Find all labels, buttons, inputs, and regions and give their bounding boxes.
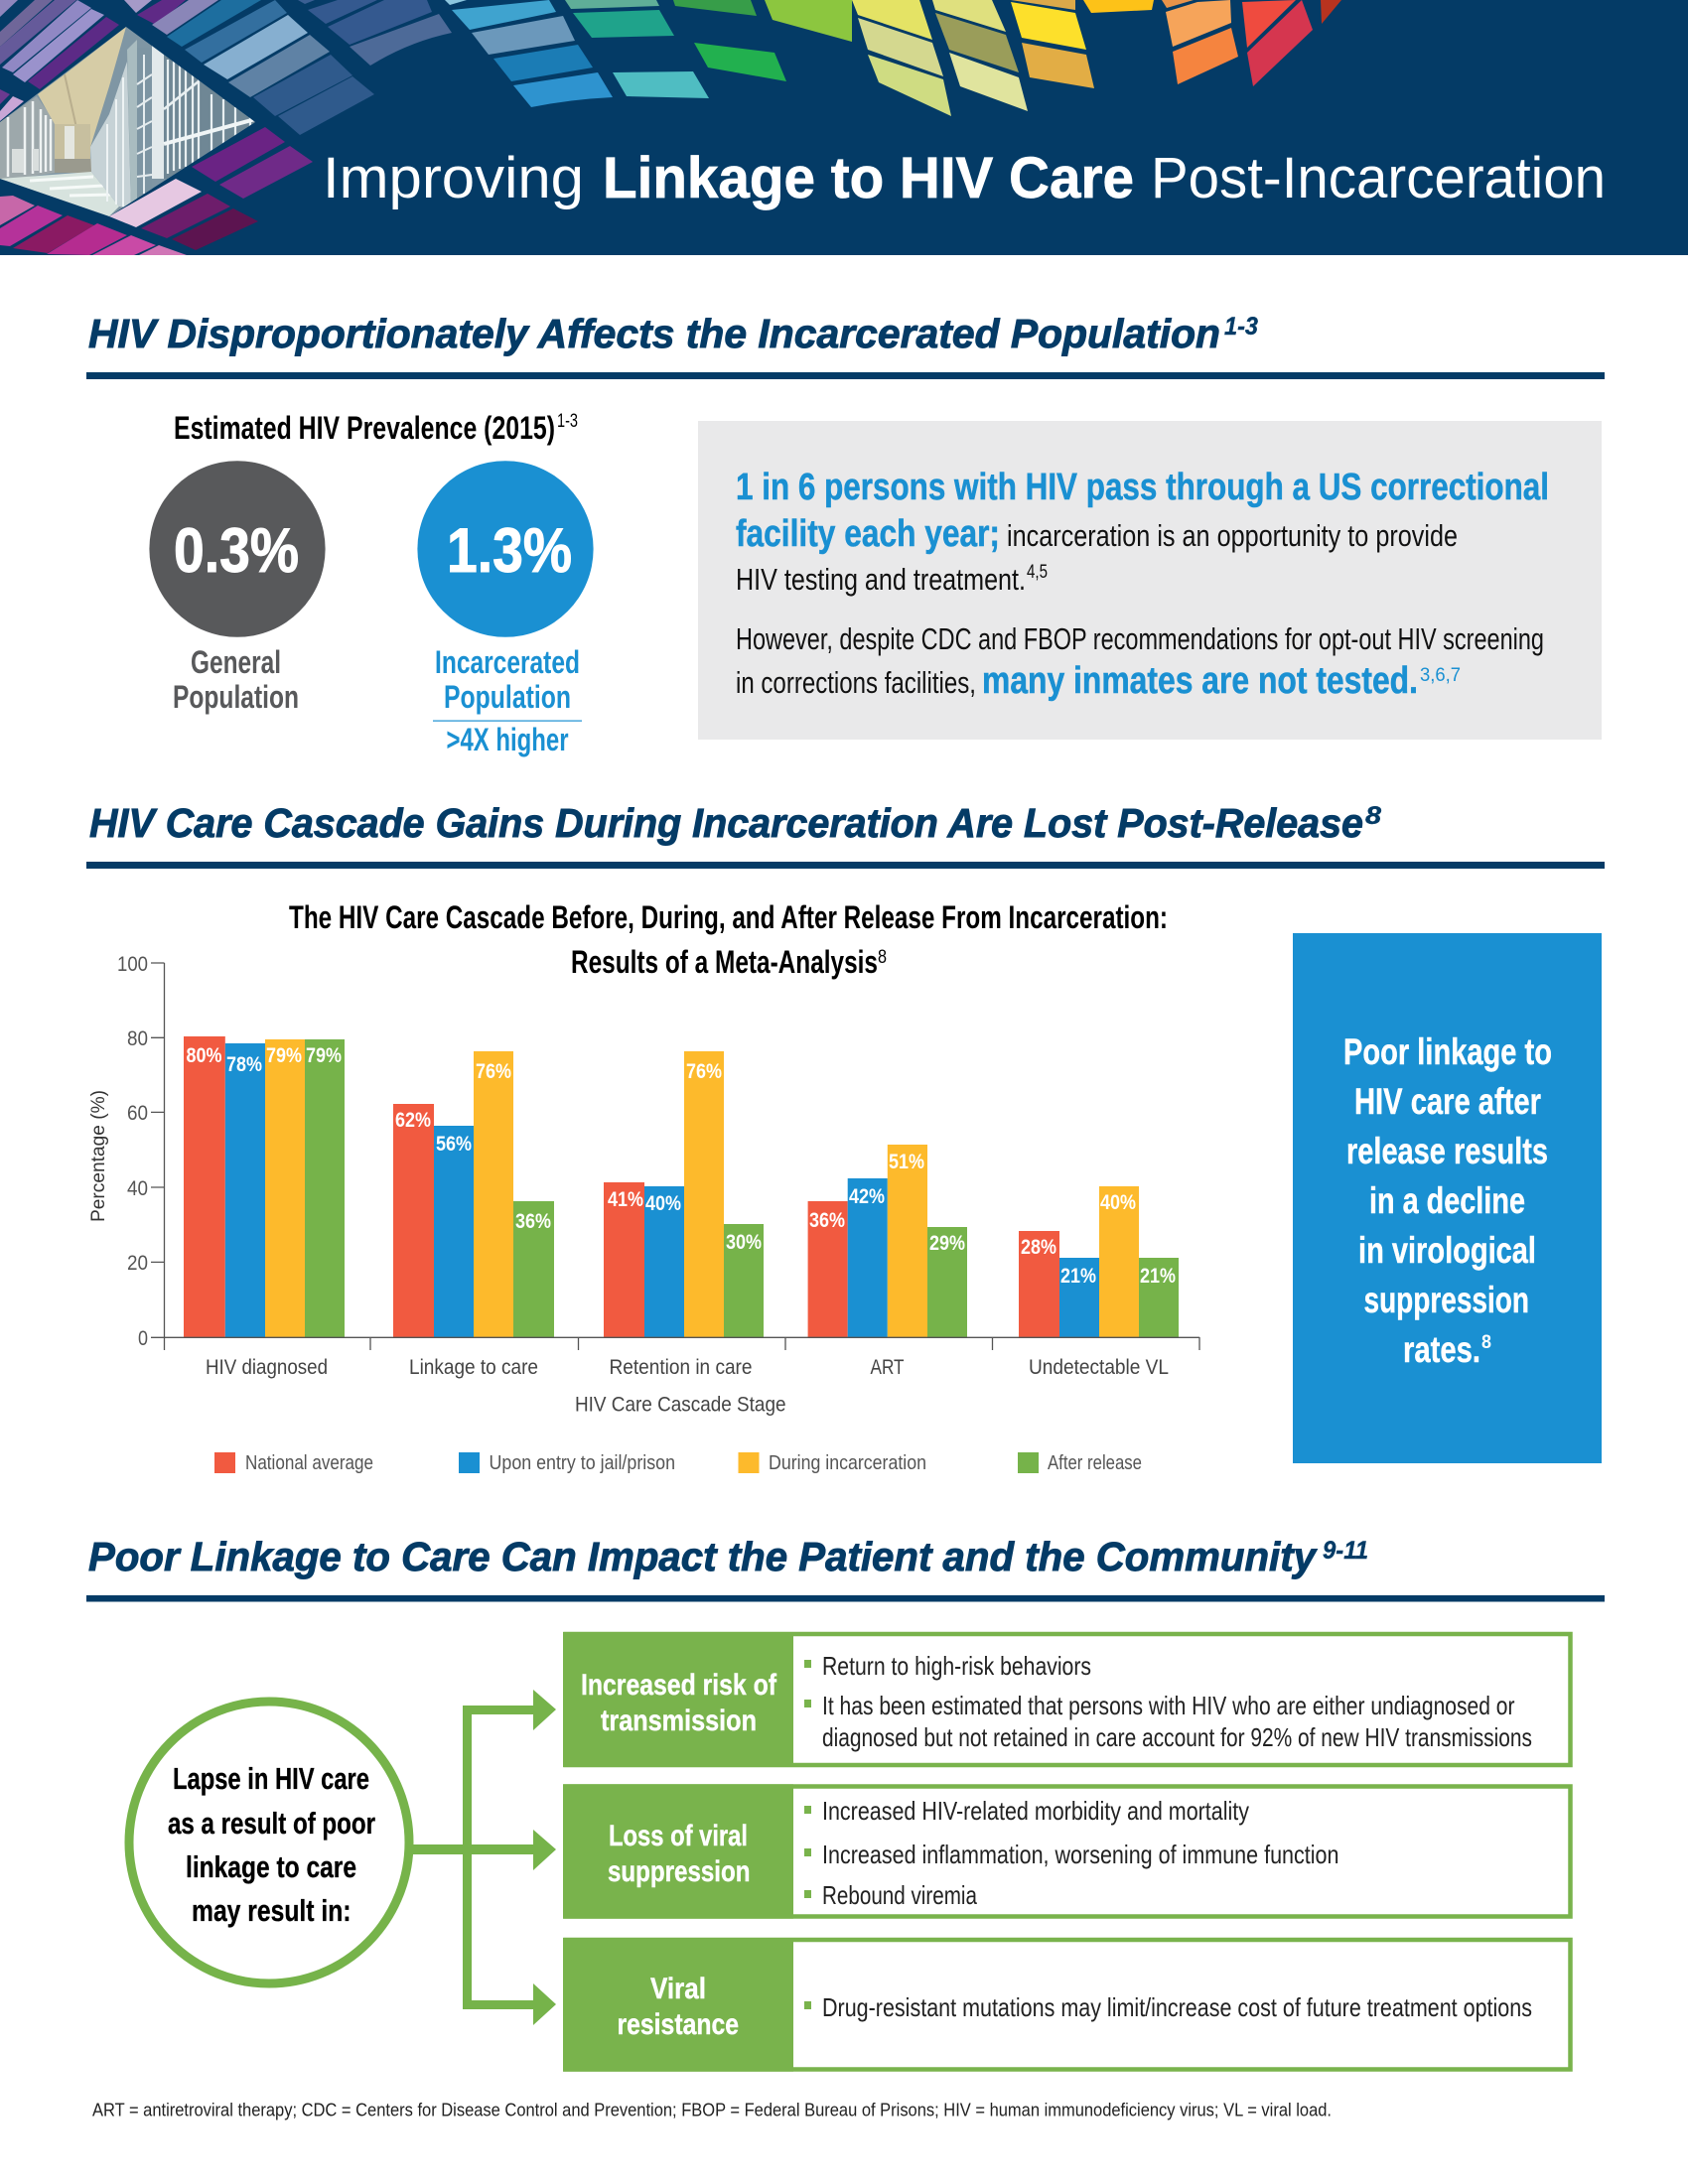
connector arrows [413, 1690, 556, 2025]
section heading: care cascade [86, 800, 1605, 869]
group: undetectable VL [1019, 1186, 1179, 1337]
y axis labels: Percentage (%) [88, 1090, 109, 1222]
group: retention in care: 40% [645, 1192, 681, 1215]
x axis labels [206, 1356, 1169, 1416]
circle: general population: 0.3% [174, 516, 299, 586]
section heading: HIV disproportionately affects: 1-3 [1224, 313, 1258, 341]
circle: incarcerated population: 1.3% [447, 516, 572, 586]
panel: HIV prevalence circles [149, 410, 594, 757]
panel: 1 in 6 callout: 3,6,7 [1420, 665, 1461, 686]
group: retention in care: 76% [686, 1060, 722, 1083]
group: undetectable VL: 21% [1140, 1265, 1176, 1288]
group: ART: 36% [809, 1209, 845, 1232]
section heading: HIV disproportionately affects [86, 311, 1605, 379]
legend: National average [245, 1452, 373, 1474]
group: linkage to care: 56% [436, 1133, 472, 1156]
section heading: HIV disproportionately affects: HIV Disproportionately Affects the Incarcerated Population [88, 311, 1220, 356]
purple and pink tiles bottom [0, 127, 313, 255]
section heading: care cascade: 8 [1365, 802, 1381, 830]
chart title: The HIV Care Cascade Before, During, and After Release From Incarceration: [289, 899, 1168, 935]
outcome: loss of viral suppression: Increased HIV-related morbidity and mortality [822, 1796, 1249, 1826]
title: Linkage to HIV Care [603, 146, 1134, 210]
panel: poor linkage callout: in virological [1358, 1230, 1536, 1271]
outcome: increased risk of transmission: diagnosed but not retained in care account for 92% of new HIV transmissions [822, 1722, 1532, 1752]
legend: During incarceration [769, 1452, 926, 1474]
group: HIV diagnosed: 79% [306, 1044, 342, 1067]
outcome: viral resistance: Viral [650, 1973, 706, 2005]
y axis labels [88, 953, 148, 1350]
group: linkage to care: 36% [515, 1210, 551, 1233]
outcome: loss of viral suppression: suppression [608, 1855, 751, 1888]
group: retention in care: 30% [726, 1231, 762, 1254]
panel: poor linkage callout: release results [1346, 1131, 1548, 1171]
group: HIV diagnosed: 79% [266, 1044, 302, 1067]
title: Improving [323, 146, 584, 210]
circle: incarcerated population: Incarcerated [435, 644, 580, 680]
prevalence heading: 1-3 [557, 411, 578, 432]
group: ART: 29% [929, 1232, 965, 1255]
axes [151, 963, 1199, 1350]
panel: poor linkage callout: rates. [1403, 1329, 1480, 1370]
left wall [0, 96, 57, 181]
outcome: viral resistance: Drug-resistant mutations may limit/increase cost of future treatment options [822, 1992, 1532, 2022]
outcome: increased risk of transmission: Return to high-risk behaviors [822, 1651, 1091, 1681]
y axis labels: 60 [127, 1102, 148, 1125]
group: undetectable VL: 21% [1060, 1265, 1096, 1288]
flow: lapse in care [129, 1690, 556, 2025]
blue tiles [124, 0, 709, 135]
y axis labels: 0 [138, 1327, 148, 1350]
panel: poor linkage callout: suppression [1364, 1280, 1529, 1320]
outcome: loss of viral suppression: Loss of viral [609, 1820, 748, 1852]
corridor photo [0, 20, 268, 218]
legend: Upon entry to jail/prison [489, 1452, 675, 1474]
title [328, 155, 1603, 210]
outcome: loss of viral suppression [563, 1784, 1571, 1919]
outcome: loss of viral suppression: Increased inflammation, worsening of immune function [822, 1840, 1338, 1869]
end wall [55, 124, 90, 159]
circle: general population [149, 461, 326, 715]
group: undetectable VL: 28% [1021, 1236, 1056, 1259]
circle: incarcerated population: >4X higher [447, 722, 568, 757]
header banner [0, 0, 1688, 255]
x axis labels: Linkage to care [409, 1356, 538, 1379]
legend [214, 1452, 1142, 1474]
outcome: increased risk of transmission [563, 1632, 1571, 1767]
group: undetectable VL: 40% [1100, 1191, 1136, 1214]
panel: 1 in 6 callout: HIV testing and treatment. [736, 562, 1026, 597]
panel: 1 in 6 callout: in corrections facilities, [736, 665, 976, 700]
footnote: ART = antiretroviral therapy; CDC = Centers for Disease Control and Prevention; FBOP = Federal Bureau of Prisons; HIV = human immunodeficiency virus; VL = viral load. [92, 2101, 1332, 2120]
chart title: Results of a Meta-Analysis [571, 944, 878, 980]
panel: 1 in 6 callout: facility each year; [736, 513, 1000, 555]
green and yellow tiles [565, 0, 1094, 116]
circle: lapse in HIV care: as a result of poor [168, 1806, 375, 1841]
group: linkage to care: 76% [476, 1060, 511, 1083]
prevalence heading: Estimated HIV Prevalence (2015) [174, 410, 555, 446]
outcome: increased risk of transmission: transmission [601, 1705, 757, 1737]
circle: general population: General [191, 644, 281, 680]
group: HIV diagnosed: 80% [187, 1044, 222, 1067]
outcome: increased risk of transmission: Increased risk of [581, 1669, 777, 1702]
section heading: care cascade: HIV Care Cascade Gains During Incarceration Are Lost Post-Release [89, 800, 1363, 846]
circle: incarcerated population [417, 461, 594, 757]
right wall near [90, 62, 131, 208]
x axis labels: Undetectable VL [1029, 1356, 1169, 1379]
panel: poor linkage callout [1293, 933, 1602, 1463]
purple tiles top left [0, 0, 119, 121]
floor [0, 172, 119, 216]
group: ART: 42% [849, 1185, 885, 1208]
legend: After release [1048, 1452, 1142, 1474]
group: linkage to care [393, 1051, 554, 1337]
group: HIV diagnosed [184, 1036, 345, 1337]
circle: lapse in HIV care: linkage to care [186, 1849, 356, 1884]
panel: poor linkage callout: in a decline [1369, 1180, 1525, 1221]
group: ART [808, 1145, 967, 1337]
x axis labels: ART [870, 1356, 905, 1379]
group: retention in care [604, 1051, 764, 1337]
section heading: poor linkage impact: 9-11 [1323, 1537, 1368, 1565]
section heading: poor linkage impact [86, 1534, 1605, 1602]
outcome: viral resistance [563, 1938, 1571, 2072]
section heading: poor linkage impact: Poor Linkage to Care Can Impact the Patient and the Community [88, 1534, 1318, 1579]
outcome: loss of viral suppression: Rebound viremia [822, 1880, 977, 1910]
y axis labels: 80 [127, 1027, 148, 1050]
panel: poor linkage callout: HIV care after [1354, 1081, 1541, 1122]
y axis labels: 40 [127, 1177, 148, 1200]
chart title [289, 899, 1168, 980]
chart title: 8 [878, 947, 887, 968]
group: ART: 51% [889, 1151, 924, 1173]
group: HIV diagnosed: 78% [226, 1053, 262, 1076]
outcome: increased risk of transmission: It has been estimated that persons with HIV who are either undiagnosed or [822, 1691, 1515, 1720]
panel: poor linkage callout: Poor linkage to [1343, 1031, 1552, 1072]
x axis labels: HIV diagnosed [206, 1356, 328, 1379]
ceiling [38, 27, 126, 147]
panel: poor linkage callout: 8 [1481, 1332, 1491, 1353]
outcome: viral resistance: resistance [618, 2008, 739, 2041]
title: Post-Incarceration [1151, 146, 1606, 210]
circle: lapse in HIV care [129, 1702, 409, 1983]
bar chart [88, 953, 1199, 1474]
window bars [164, 55, 258, 179]
x axis labels: HIV Care Cascade Stage [575, 1394, 786, 1416]
circle: general population: Population [173, 679, 299, 715]
panel: 1 in 6 callout: incarceration is an opportunity to provide [1007, 518, 1458, 553]
y axis labels: 100 [117, 953, 148, 976]
group: retention in care: 41% [608, 1188, 643, 1211]
circle: lapse in HIV care: may result in: [192, 1893, 352, 1928]
circle: lapse in HIV care: Lapse in HIV care [173, 1761, 369, 1796]
circle: incarcerated population: Population [444, 679, 571, 715]
y axis labels: 20 [127, 1252, 148, 1275]
group: linkage to care: 62% [395, 1109, 431, 1132]
panel: 1 in 6 callout: many inmates are not tested. [982, 660, 1418, 702]
x axis labels: Retention in care [610, 1356, 753, 1379]
orange and red tiles [1083, 0, 1341, 86]
panel: 1 in 6 callout [698, 421, 1602, 740]
panel: 1 in 6 callout: 4,5 [1027, 562, 1048, 583]
